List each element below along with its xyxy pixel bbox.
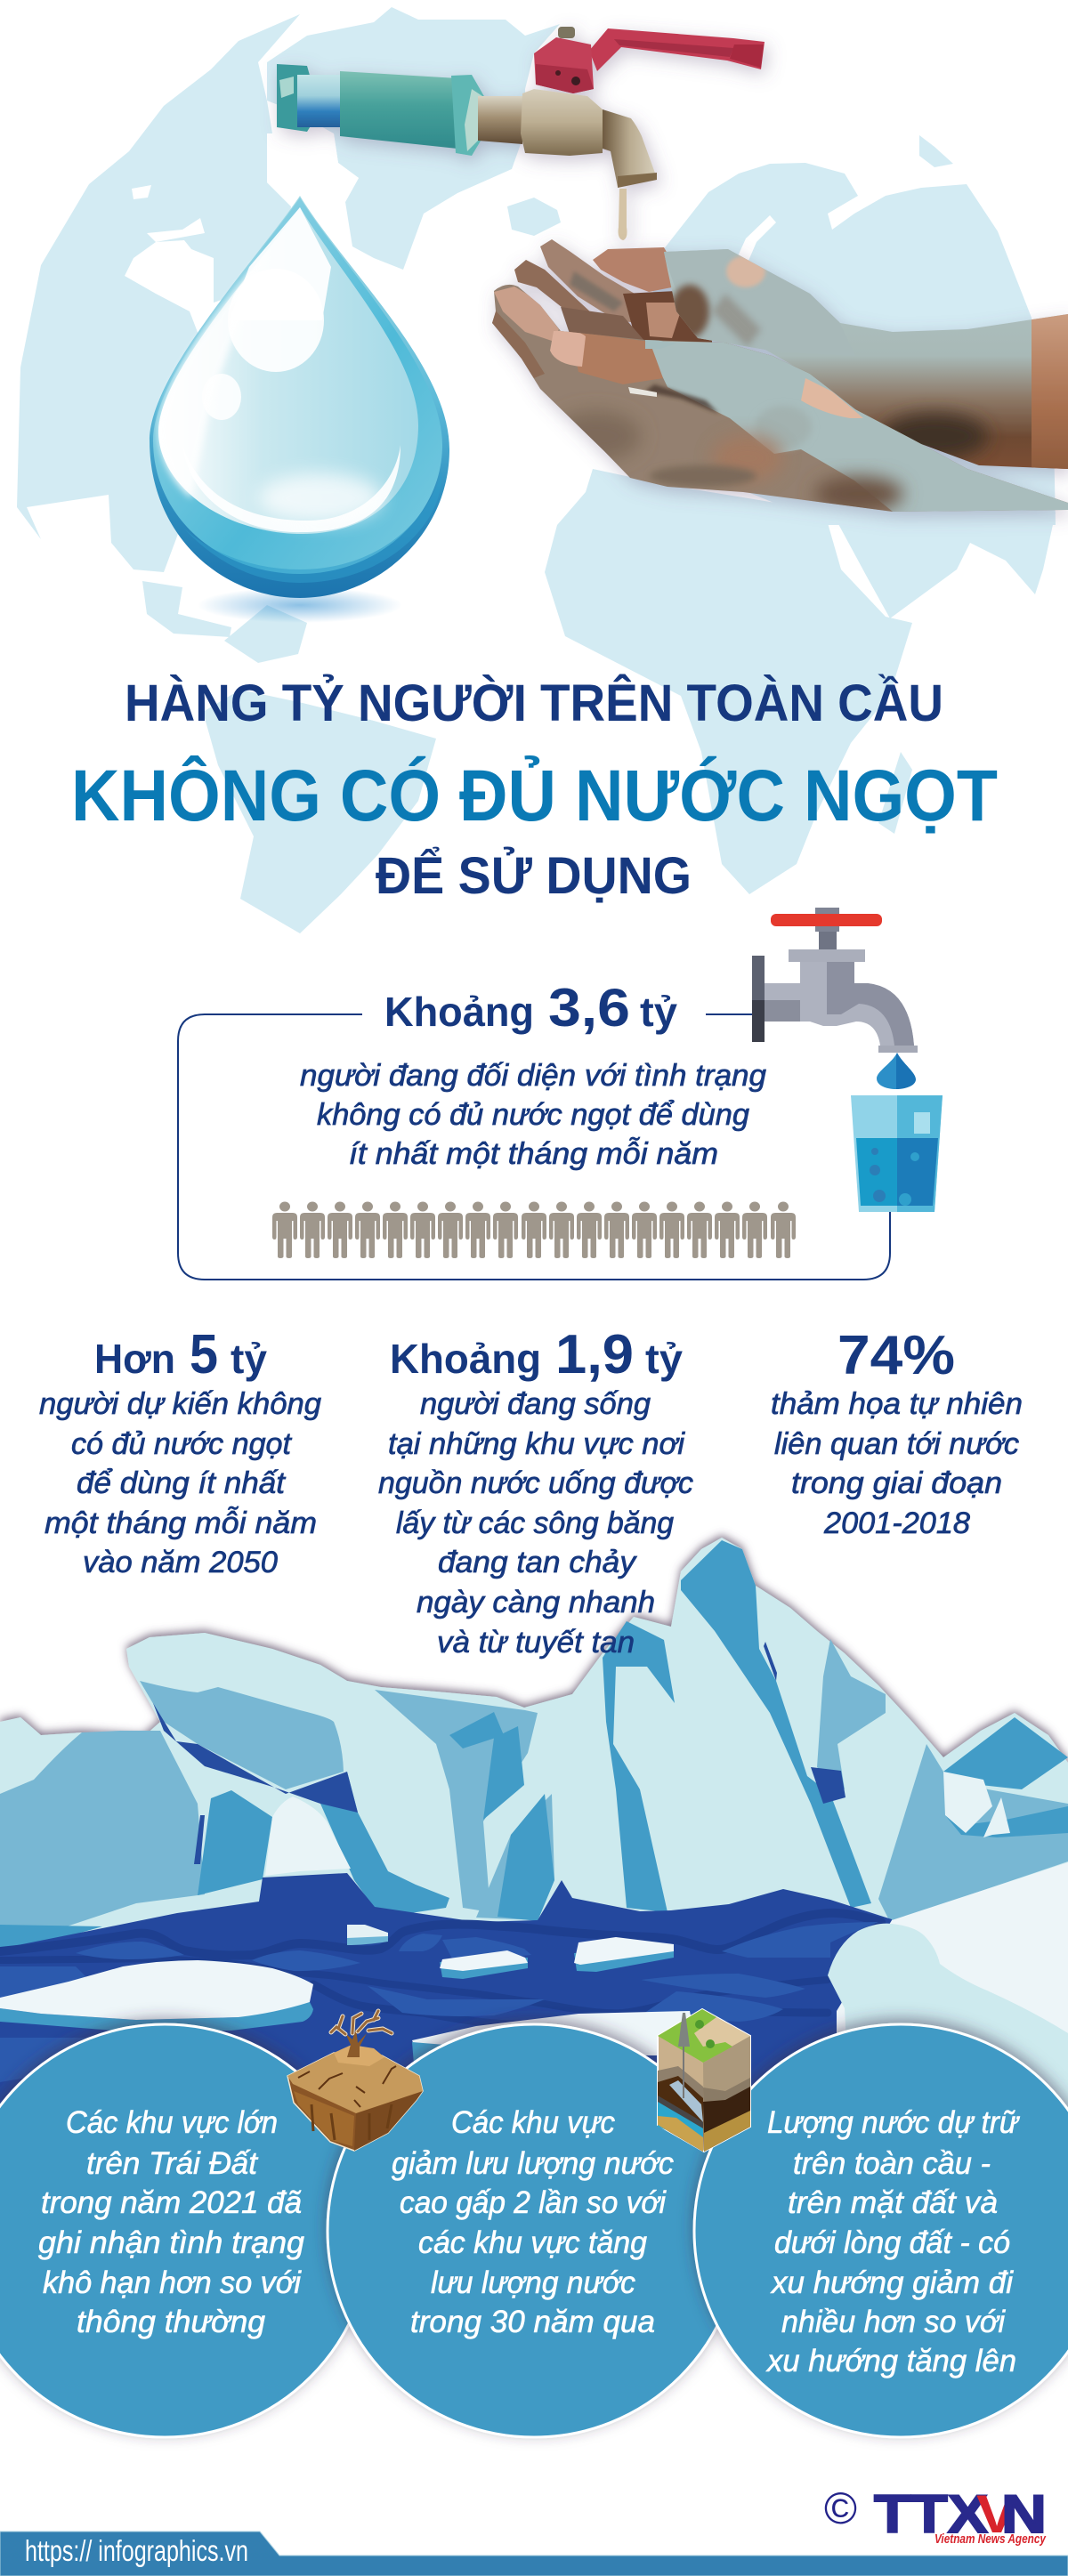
circle panel: water reserves: Lượng nước dự trữ bbox=[767, 2105, 1021, 2140]
world map background bbox=[17, 7, 1056, 933]
circle panel: water flow: giảm lưu lượng nước bbox=[392, 2146, 674, 2181]
circle panel: water flow: cao gấp 2 lần so với bbox=[400, 2185, 667, 2220]
heading: Khoảng 3,6 tỷ: 3,6 bbox=[548, 978, 630, 1038]
photo: rusty faucet bbox=[277, 27, 765, 240]
icon: ground layers cross-section bbox=[658, 2009, 750, 2152]
footer bar bbox=[0, 2532, 1068, 2576]
logo: TTXVN: N bbox=[1001, 2484, 1047, 2544]
arch opening bbox=[265, 1797, 351, 1876]
circle panel: water flow: các khu vực tăng bbox=[418, 2225, 648, 2260]
title bbox=[71, 674, 998, 905]
stat: Hơn 5 tỷ: vào năm 2050 bbox=[83, 1546, 278, 1579]
photo: cupped hands bbox=[481, 239, 1068, 516]
icon: cracked dry land with dead tree bbox=[287, 2011, 423, 2151]
stat: Hơn 5 tỷ bbox=[39, 1324, 321, 1579]
stat: Khoảng 1,9 tỷ: và từ tuyết tan bbox=[437, 1626, 635, 1659]
circle panel: drought: Các khu vực lớn bbox=[66, 2105, 278, 2140]
stat: Khoảng 1,9 tỷ: lấy từ các sông băng bbox=[396, 1506, 674, 1540]
stat: Khoảng 1,9 tỷ: đang tan chảy bbox=[438, 1546, 637, 1579]
footer bar: https:// infographics.vn bbox=[25, 2534, 248, 2567]
upper hand palm and arm bbox=[659, 240, 1068, 476]
heading: Khoảng 3,6 tỷ: Khoảng bbox=[384, 989, 534, 1035]
stat: 74%: 2001-2018 bbox=[823, 1506, 970, 1540]
title: ĐỂ SỬ DỤNG bbox=[376, 847, 692, 905]
circle panel: drought: thông thường bbox=[77, 2305, 266, 2339]
logo: TTXVN: V bbox=[976, 2484, 1017, 2544]
stat: Khoảng 1,9 tỷ: 1,9 bbox=[555, 1324, 634, 1385]
upper hand fingers bbox=[514, 239, 712, 345]
heading: Khoảng 3,6 tỷ bbox=[384, 978, 677, 1038]
panel: 3.6 billion bbox=[178, 908, 943, 1280]
title: HÀNG TỶ NGƯỜI TRÊN TOÀN CẦU bbox=[125, 674, 943, 732]
stat: Hơn 5 tỷ: Hơn bbox=[94, 1336, 175, 1382]
stat: Khoảng 1,9 tỷ: tại những khu vực nơi bbox=[388, 1427, 685, 1461]
circle panel: water reserves: trên toàn cầu - bbox=[793, 2146, 991, 2181]
logo: TTXVN: TTX bbox=[874, 2484, 988, 2544]
illustration: water drop bbox=[150, 196, 449, 623]
stat: Khoảng 1,9 tỷ: người đang sống bbox=[420, 1387, 651, 1421]
stat: Hơn 5 tỷ: 5 bbox=[190, 1324, 218, 1385]
stat: 74%: 74% bbox=[837, 1325, 955, 1386]
circle panel: water flow: Các khu vực bbox=[451, 2105, 615, 2140]
stat: Khoảng 1,9 tỷ bbox=[378, 1324, 693, 1659]
circle panel: water flow bbox=[328, 2024, 740, 2437]
stat: Hơn 5 tỷ: một tháng mỗi năm bbox=[44, 1506, 317, 1540]
stat: Khoảng 1,9 tỷ: Khoảng bbox=[390, 1336, 541, 1382]
circle panel: water flow: lưu lượng nước bbox=[431, 2265, 635, 2300]
ice floes bbox=[0, 1862, 1068, 2136]
text block: ít nhất một tháng mỗi năm bbox=[349, 1137, 718, 1171]
iceberg silhouette bbox=[0, 1538, 1068, 2047]
circle panel: water reserves: trên mặt đất và bbox=[788, 2185, 998, 2220]
map inlets bbox=[132, 133, 776, 267]
heading: Khoảng 3,6 tỷ: tỷ bbox=[640, 989, 677, 1035]
lower hand bbox=[481, 276, 1068, 516]
stat: Khoảng 1,9 tỷ: ngày càng nhanh bbox=[417, 1586, 655, 1619]
circle panel: water reserves: nhiều hơn so với bbox=[781, 2305, 1006, 2339]
logo: TTXVN bbox=[824, 2483, 1047, 2547]
circle panel: drought bbox=[0, 2024, 371, 2437]
stat: 74% bbox=[771, 1325, 1023, 1540]
illustration: iceberg bbox=[0, 1538, 1068, 2136]
stat: Hơn 5 tỷ: người dự kiến không bbox=[39, 1387, 321, 1421]
circle panel: drought: ghi nhận tình trạng bbox=[38, 2225, 305, 2260]
stat: 74%: thảm họa tự nhiên bbox=[771, 1387, 1023, 1421]
text block bbox=[300, 1059, 766, 1171]
circle panel: water flow: trong 30 năm qua bbox=[410, 2305, 655, 2339]
circle panel: water reserves: xu hướng tăng lên bbox=[765, 2344, 1016, 2378]
people row bbox=[272, 1201, 796, 1258]
text block: người đang đối diện với tình trạng bbox=[300, 1059, 766, 1093]
river bbox=[0, 1873, 908, 2136]
circle panel: water reserves: xu hướng giảm đi bbox=[770, 2265, 1014, 2300]
stat: Hơn 5 tỷ: có đủ nước ngọt bbox=[71, 1427, 293, 1461]
stat: Khoảng 1,9 tỷ: nguồn nước uống được bbox=[378, 1466, 693, 1500]
title: KHÔNG CÓ ĐỦ NƯỚC NGỌT bbox=[71, 755, 998, 836]
circle panel: water reserves: dưới lòng đất - có bbox=[774, 2225, 1010, 2260]
stat: 74%: liên quan tới nước bbox=[774, 1427, 1019, 1461]
circle panel: drought: trong năm 2021 đã bbox=[41, 2185, 302, 2220]
icon: tap and glass bbox=[752, 908, 943, 1212]
circle panel: water reserves bbox=[694, 2024, 1068, 2437]
text block: không có đủ nước ngọt để dùng bbox=[317, 1098, 749, 1132]
stat: Khoảng 1,9 tỷ: tỷ bbox=[645, 1336, 683, 1382]
circle panel: drought: khô hạn hơn so với bbox=[43, 2265, 302, 2300]
stat: 74%: trong giai đoạn bbox=[791, 1466, 1002, 1500]
stat: Hơn 5 tỷ: để dùng ít nhất bbox=[77, 1466, 287, 1500]
ice shading bbox=[0, 1639, 1068, 1949]
stat: Hơn 5 tỷ: tỷ bbox=[231, 1336, 267, 1382]
circle panel: drought: trên Trái Đất bbox=[86, 2146, 258, 2181]
logo: TTXVN: © bbox=[824, 2483, 857, 2533]
